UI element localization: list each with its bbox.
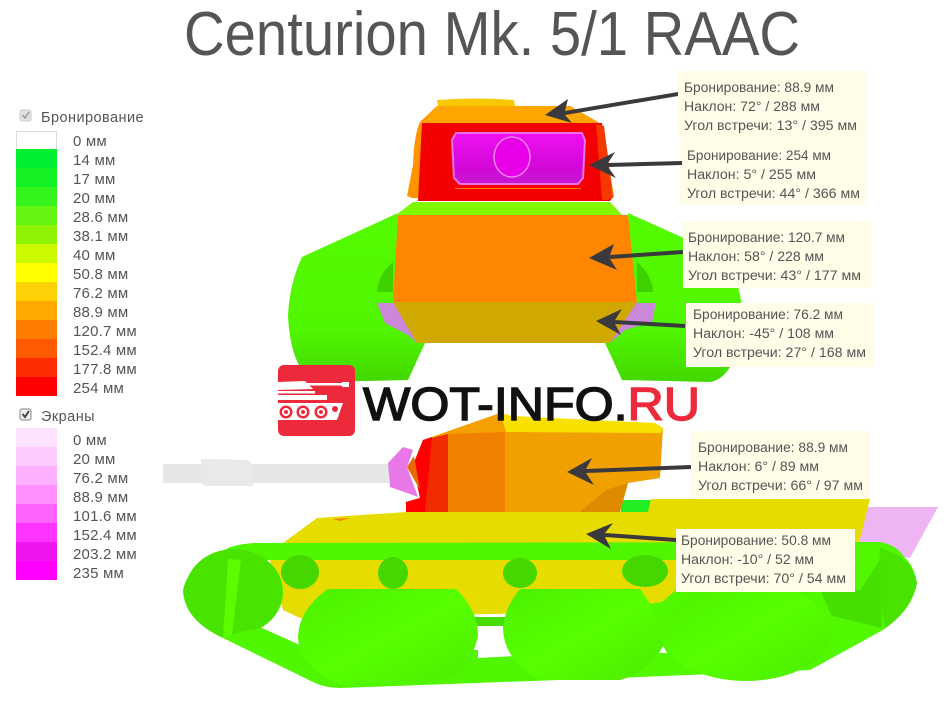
rear screen (856, 507, 938, 558)
callout: upper glacis (683, 221, 872, 288)
screens legend values: 203.2 мм (73, 546, 137, 563)
armour legend values: 14 мм (73, 152, 115, 169)
armour legend heading: Бронирование (41, 110, 144, 126)
armour checkbox (20, 110, 31, 121)
screens colour swatches (16, 428, 57, 580)
muzzle brake (201, 459, 254, 486)
callout: upper glacis: Наклон: 58° / 228 мм (688, 249, 824, 264)
screens legend values: 152.4 мм (73, 527, 137, 544)
armour legend values (73, 133, 137, 397)
callout: lower glacis: Бронирование: 76.2 мм (693, 307, 843, 322)
left track (288, 213, 425, 382)
road wheel 2 (503, 589, 663, 680)
turret right edge (596, 124, 613, 200)
screens legend values (73, 432, 137, 582)
upper glacis (393, 215, 637, 302)
gun port circle (494, 137, 530, 177)
legend: screens (16, 409, 137, 582)
screens legend values: 235 мм (73, 565, 124, 582)
armour legend values: 177.8 мм (73, 361, 137, 378)
callout: turret roof: Угол встречи: 13° / 395 мм (684, 118, 857, 133)
callout: gun mantlet: Наклон: 5° / 255 мм (687, 167, 816, 182)
armour legend values: 88.9 мм (73, 304, 128, 321)
armour legend values: 17 мм (73, 171, 115, 188)
callout: hull side: Бронирование: 50.8 мм (681, 533, 831, 548)
tank front view (288, 98, 743, 382)
side screens left (377, 303, 417, 343)
arrow: hull side (586, 523, 676, 549)
front idler wheel (183, 548, 232, 638)
gun barrel (163, 464, 389, 483)
road wheel 1 (298, 589, 478, 685)
mantlet slit (455, 188, 581, 189)
gap between wheels (659, 646, 667, 653)
arrow: upper glacis (589, 244, 683, 270)
screens legend values: 76.2 мм (73, 470, 128, 487)
lower glacis (393, 302, 637, 343)
shield cone (407, 456, 420, 490)
logo icon (278, 365, 355, 436)
hull roof strip (396, 202, 622, 215)
screens legend values: 0 мм (73, 432, 107, 449)
screens legend values: 88.9 мм (73, 489, 128, 506)
turret (407, 106, 614, 200)
callout: gun mantlet: Бронирование: 254 мм (687, 148, 831, 163)
title: Centurion Mk. 5/1 RAAC (184, 0, 800, 69)
callout: upper glacis: Угол встречи: 43° / 177 мм (688, 268, 861, 283)
armour legend values: 152.4 мм (73, 342, 137, 359)
green engine deck (621, 500, 653, 514)
track inner shading (377, 262, 393, 292)
road wheel 3 (661, 583, 831, 681)
rear wheel shading (820, 560, 882, 628)
callout: turret side: Угол встречи: 66° / 97 мм (698, 478, 863, 493)
side screens right (610, 303, 656, 343)
turret hatch (437, 98, 515, 106)
arrow: turret roof (545, 92, 678, 123)
lower track run (223, 628, 640, 688)
callout: gun mantlet (680, 139, 866, 205)
gun mantlet (452, 133, 585, 184)
armour legend values: 28.6 мм (73, 209, 128, 226)
callout: lower glacis: Угол встречи: 27° / 168 мм (693, 345, 866, 360)
screens legend values: 101.6 мм (73, 508, 137, 525)
turret face red (418, 123, 612, 201)
rear hull top (640, 499, 870, 547)
callout: hull side: Наклон: -10° / 52 мм (681, 552, 814, 567)
arrow: gun mantlet (589, 152, 682, 178)
inner track link (470, 617, 510, 626)
armour legend values: 254 мм (73, 380, 124, 397)
armour legend values: 76.2 мм (73, 285, 128, 302)
callout: hull side (676, 529, 855, 592)
tank side view (163, 413, 938, 688)
armour legend values: 50.8 мм (73, 266, 128, 283)
screens legend heading: Экраны (41, 409, 95, 425)
callout: turret roof: Наклон: 72° / 288 мм (684, 99, 820, 114)
hull front detail (333, 518, 350, 521)
callout: lower glacis (686, 303, 874, 367)
arrow: lower glacis (596, 309, 685, 335)
armour legend values: 120.7 мм (73, 323, 137, 340)
arrow: turret side (567, 458, 691, 485)
rear track mass (610, 544, 917, 678)
legend: armour (16, 110, 144, 397)
return rollers (281, 555, 668, 589)
armour colour swatches (16, 132, 57, 396)
callout: upper glacis: Бронирование: 120.7 мм (688, 230, 845, 245)
armour legend values: 0 мм (73, 133, 107, 150)
logo wordmark: WOT-INFO. RU (363, 378, 700, 430)
upper hull (283, 512, 660, 545)
callout: lower glacis: Наклон: -45° / 108 мм (693, 326, 834, 341)
rear sprocket shading (878, 548, 917, 628)
callout: gun mantlet: Угол встречи: 44° / 366 мм (687, 186, 860, 201)
armour legend values: 40 мм (73, 247, 115, 264)
lower hull side (270, 543, 690, 618)
turret side (406, 413, 663, 512)
callout: turret side: Наклон: 6° / 89 мм (698, 459, 819, 474)
screens checkbox (20, 409, 31, 420)
callout: turret roof (678, 71, 866, 138)
gun shield (388, 447, 418, 497)
callout: hull side: Угол встречи: 70° / 54 мм (681, 571, 846, 586)
callout: turret roof: Бронирование: 88.9 мм (684, 80, 834, 95)
armour legend values: 38.1 мм (73, 228, 128, 245)
upper track run (226, 542, 905, 560)
armour legend values: 20 мм (73, 190, 115, 207)
callout: turret side (691, 431, 870, 499)
callout: turret side: Бронирование: 88.9 мм (698, 440, 848, 455)
right track (605, 213, 743, 382)
screens legend values: 20 мм (73, 451, 115, 468)
turret roof (422, 106, 600, 124)
